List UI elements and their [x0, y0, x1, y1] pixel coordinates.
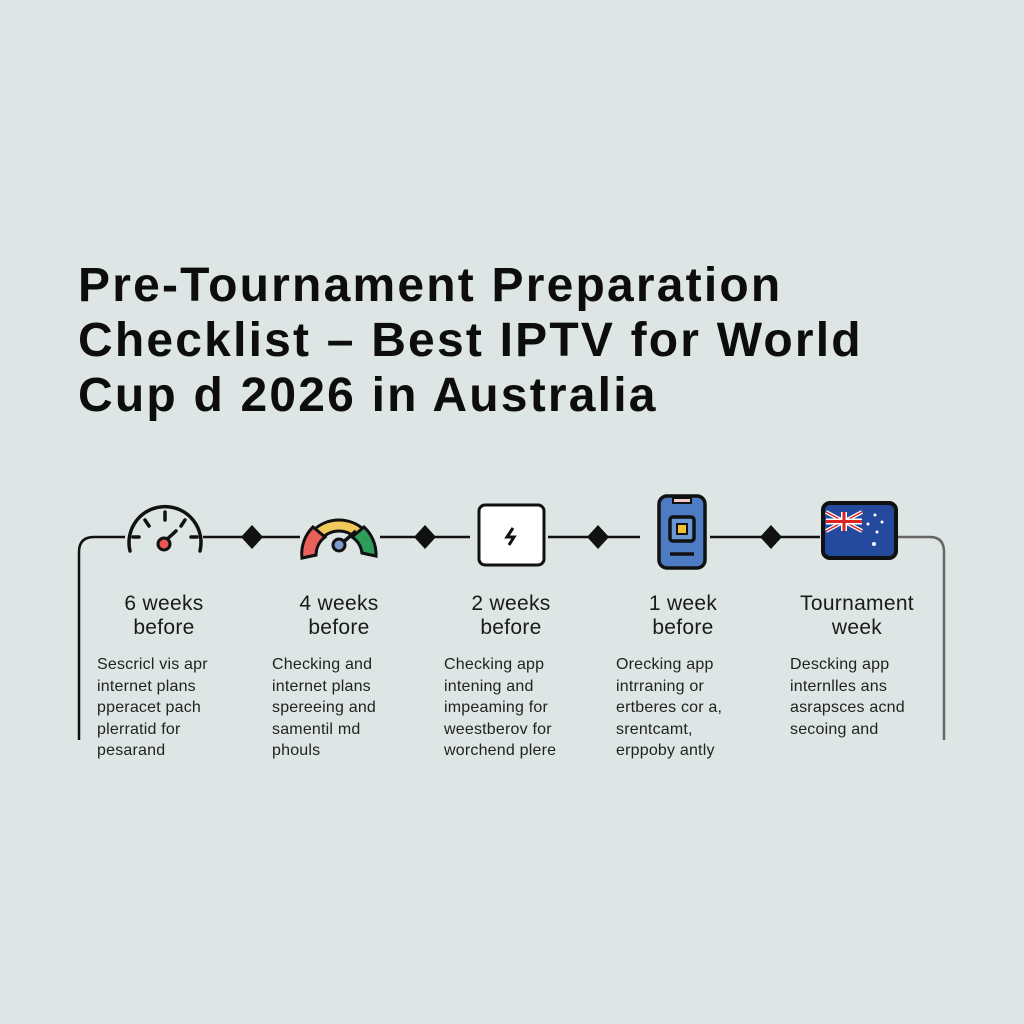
- icon: phone: [659, 496, 705, 568]
- column: 1 week: intrraning or: [616, 678, 704, 694]
- column: tournament week: secoing and: [790, 720, 878, 738]
- column: 1 week: [616, 592, 722, 759]
- column: 6 weeks: 6 weeks: [124, 592, 204, 615]
- column: 6 weeks: internet plans: [97, 678, 196, 694]
- column: 6 weeks: plerratid for: [97, 720, 181, 738]
- column: tournament week: Tournament: [800, 592, 914, 615]
- title: Pre-Tournament Preparation: [78, 259, 782, 312]
- column: tournament week: asrapsces acnd: [790, 699, 905, 716]
- column: 1 week: ertberes cor a,: [616, 699, 722, 716]
- column: 2 weeks: weestberov for: [444, 720, 552, 738]
- column: 6 weeks: before: [133, 616, 195, 639]
- icon: speedometer: [129, 507, 201, 551]
- column: 2 weeks: [444, 592, 556, 759]
- column: 1 week: 1 week: [649, 592, 717, 615]
- column: 4 weeks: internet plans: [272, 678, 371, 694]
- column: 1 week: erppoby antly: [616, 742, 715, 759]
- icon: lightning box: [479, 505, 544, 565]
- column: 2 weeks: worchend plere: [444, 742, 556, 759]
- column: 6 weeks: Sescricl vis apr: [97, 656, 208, 673]
- column: tournament week: Descking app: [790, 656, 889, 673]
- column: 2 weeks: Checking app: [444, 656, 544, 673]
- column: tournament week: week: [832, 616, 882, 639]
- column: 4 weeks: phouls: [272, 742, 320, 759]
- column: 4 weeks: samentil md: [272, 720, 360, 738]
- column: 2 weeks: 2 weeks: [471, 592, 551, 615]
- column: 2 weeks: intening and: [444, 678, 534, 694]
- column: 1 week: before: [652, 616, 714, 639]
- column: 2 weeks: impeaming for: [444, 699, 548, 716]
- column: 4 weeks: [272, 592, 379, 759]
- column: 1 week: Orecking app: [616, 656, 714, 673]
- column: 4 weeks: Checking and: [272, 656, 372, 673]
- column: 4 weeks: 4 weeks: [299, 592, 379, 615]
- icon: colored gauge: [302, 520, 376, 558]
- column: tournament week: [790, 592, 914, 738]
- column: 6 weeks: [97, 592, 208, 759]
- title: Cup d 2026 in Australia: [78, 369, 658, 422]
- column: 1 week: srentcamt,: [616, 720, 693, 738]
- column: 4 weeks: before: [308, 616, 370, 639]
- column: tournament week: internlles ans: [790, 678, 887, 694]
- column: 6 weeks: pperacet pach: [97, 699, 201, 716]
- column: 4 weeks: spereeing and: [272, 699, 376, 716]
- title: [78, 259, 863, 422]
- column: 2 weeks: before: [480, 616, 542, 639]
- icon: australian flag: [823, 503, 896, 558]
- title: Checklist – Best IPTV for World: [78, 314, 863, 367]
- column: 6 weeks: pesarand: [97, 742, 165, 759]
